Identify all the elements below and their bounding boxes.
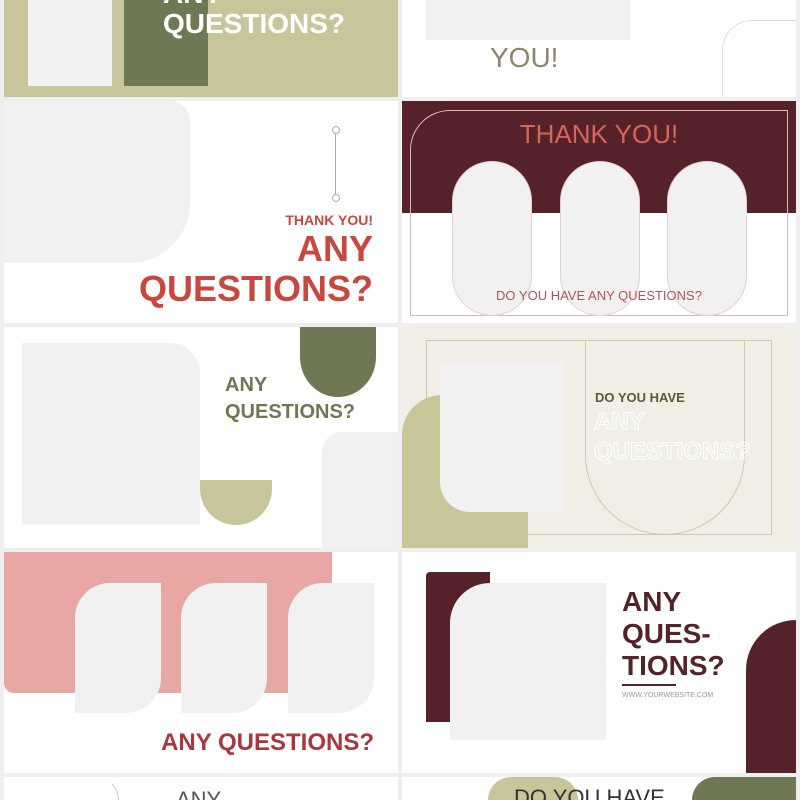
heading: any questions: ANY — [225, 374, 267, 396]
photo placeholder — [28, 0, 112, 86]
panel: slide 7 pink — [4, 552, 398, 773]
photo placeholder — [4, 101, 190, 263]
divider line and website — [622, 684, 676, 686]
maroon band — [402, 101, 796, 213]
panel: slide 10 partial — [402, 777, 796, 800]
tan circle — [488, 777, 578, 800]
heading: thank you any questions: QUESTIONS? — [139, 268, 373, 309]
leaf photos — [75, 583, 161, 713]
photo placeholder right — [322, 432, 398, 548]
heading: you: YOU! — [490, 42, 558, 73]
maroon arch — [746, 620, 796, 773]
outline shape — [722, 20, 796, 97]
tan half circle — [200, 480, 272, 525]
heading: thank you any questions — [139, 212, 373, 309]
olive circle — [692, 777, 796, 800]
arch outline — [585, 340, 745, 535]
outline frame — [410, 110, 788, 316]
heading: any questions: TIONS? — [622, 650, 725, 681]
panel: slide 5 olive — [4, 327, 398, 548]
heading: any questions: ANY QUESTIONS? — [161, 729, 374, 756]
heading: thank you any questions: THANK YOU! — [285, 212, 373, 228]
olive block — [124, 0, 208, 86]
heading: any questions — [225, 374, 355, 423]
panel: slide 6 beige — [402, 327, 796, 548]
heading: do you have any questions: DO YOU HAVE — [595, 390, 685, 405]
outline frame — [426, 340, 772, 535]
tan shape — [402, 395, 528, 548]
heading: any questions: QUES- — [622, 618, 711, 649]
heading: any questions: ANY — [622, 586, 681, 617]
maroon block — [426, 572, 490, 722]
heading: any questions: QUESTIONS? — [163, 8, 345, 39]
heading: any questions: QUESTIONS? — [225, 401, 355, 423]
photo placeholder — [22, 343, 200, 525]
panel: slide 1 tan — [4, 0, 398, 97]
arc line — [4, 777, 119, 800]
heading: thank you: THANK YOU! — [520, 119, 678, 149]
subheading: DO YOU HAVE ANY QUESTIONS? — [496, 288, 702, 303]
panel: slide 9 partial — [4, 777, 398, 800]
panel: slide 8 maroon — [402, 552, 796, 773]
panel: slide 4 maroon pills — [402, 101, 796, 323]
olive circle segment — [300, 327, 376, 397]
pill photos — [452, 161, 532, 316]
heading: thank you any questions: ANY — [297, 228, 373, 269]
pink block — [4, 552, 332, 693]
photo placeholder — [440, 362, 565, 512]
panel: slide 3 red — [4, 101, 398, 323]
panel: slide 8 maroon: WWW.YOURWEBSITE.COM — [622, 692, 713, 699]
photo placeholder — [426, 0, 630, 40]
heading: any questions — [622, 586, 725, 681]
vertical line connector — [332, 126, 340, 202]
photo placeholder — [450, 583, 606, 740]
panel: slide 2 thank you — [402, 0, 796, 97]
